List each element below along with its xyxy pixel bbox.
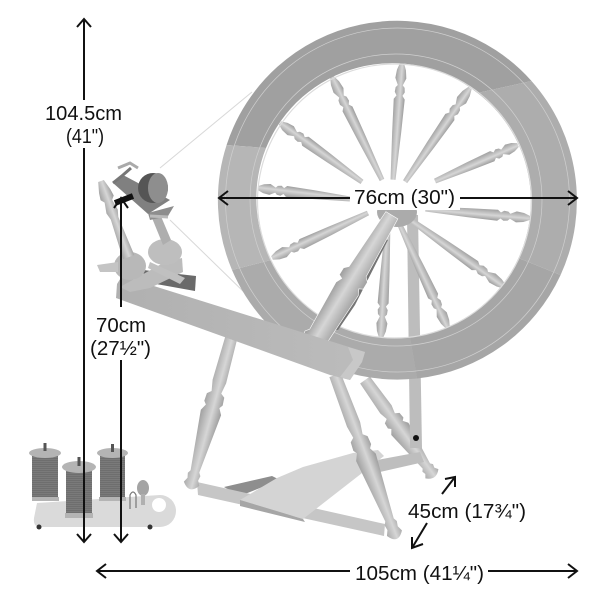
label: total height [45, 103, 122, 148]
spokes [257, 63, 530, 338]
bobbin 1 [29, 443, 61, 501]
white label box [350, 185, 460, 210]
kate base [34, 495, 176, 527]
back leg [356, 374, 443, 483]
bobbin 3 [97, 444, 128, 501]
height arrow: 104.5cm [77, 19, 91, 542]
label: orifice height [90, 315, 151, 360]
knob and hook [130, 480, 149, 509]
label: total height: (41") [66, 126, 104, 148]
middle leg [325, 371, 406, 543]
wheel rim [218, 21, 577, 380]
wheel diameter arrow [219, 191, 577, 205]
width arrow [97, 564, 577, 578]
wheel support post [301, 208, 404, 352]
lazy kate: base with bobbins [29, 443, 176, 530]
label: width: 105cm (41¼") [355, 563, 484, 585]
label: wheel diameter: 76cm (30") [354, 187, 455, 209]
bobbin 2 [62, 457, 96, 518]
drive band [160, 92, 252, 296]
label: orifice height: (27½") [90, 338, 151, 360]
upright post [407, 215, 422, 448]
label: depth: 45cm (17¾") [408, 501, 526, 523]
flyer assembly [94, 163, 196, 292]
label: total height: 104.5cm [45, 103, 122, 125]
depth arrows [412, 477, 455, 548]
label: orifice height: 70cm [96, 315, 146, 337]
beam [116, 276, 365, 380]
wheel support post rear [322, 235, 388, 330]
left leg [180, 332, 242, 492]
hub [377, 197, 417, 227]
orifice height arrow: 70cm [114, 198, 128, 542]
treadle [197, 450, 424, 536]
